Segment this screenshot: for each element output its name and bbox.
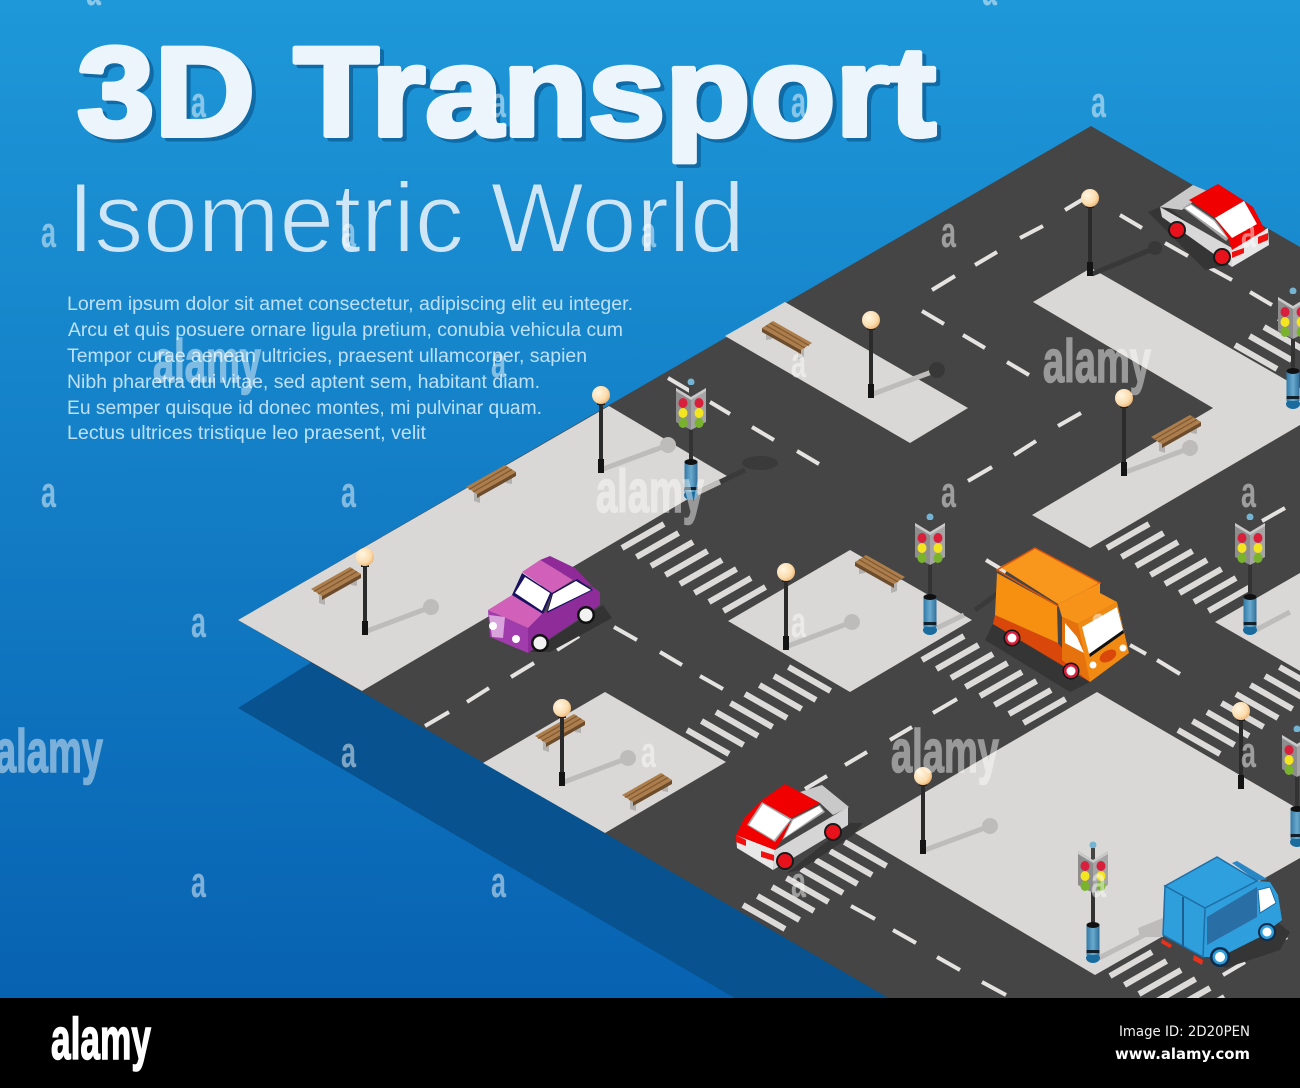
watermark letters: a <box>941 208 956 257</box>
body text block: Lorem ipsum dolor sit amet consectetur, adipiscing elit eu integer. <box>67 294 633 315</box>
watermark letters: a <box>1091 858 1106 907</box>
watermark letters: a <box>341 208 356 257</box>
body text block: Eu semper quisque id donec montes, mi pulvinar quam. <box>67 398 542 419</box>
watermark letters: a <box>1241 468 1256 517</box>
road surface <box>238 126 1300 1000</box>
watermark letters: a <box>791 858 806 907</box>
watermark letters: a <box>41 468 56 517</box>
car: red and white top right <box>1148 184 1269 270</box>
bottom black band <box>0 998 1300 1088</box>
body text block: Tempor curae aenean ultricies, praesent ullamcorper, sapien <box>67 346 587 367</box>
truck: orange <box>985 548 1129 692</box>
watermark letters: a <box>791 338 806 387</box>
body text block: Lectus ultrices tristique leo praesent, velit <box>67 423 427 444</box>
crosswalks <box>622 282 1300 1039</box>
watermark words: alamy <box>596 458 704 525</box>
traffic light shadows <box>695 456 1290 958</box>
watermark words: alamy <box>0 718 103 785</box>
watermark letters: a <box>641 728 656 777</box>
title: 3D Transport: 3D Transport <box>77 20 936 162</box>
watermark letters: a <box>341 468 356 517</box>
car: purple <box>488 556 612 653</box>
website: www.alamy.com <box>1115 1045 1250 1063</box>
watermark words: alamy <box>1043 328 1151 395</box>
watermark letters: a <box>491 78 506 127</box>
watermark letters: a <box>191 858 206 907</box>
watermark letters: a <box>491 858 506 907</box>
watermark letters: a <box>1091 598 1106 647</box>
car: red and white bottom <box>736 784 863 873</box>
watermark letters: a <box>491 338 506 387</box>
ground drop shadow <box>238 660 892 1000</box>
van: blue <box>1161 857 1290 968</box>
benches <box>311 321 1201 811</box>
body text block: Nibh pharetra dui vitae, sed aptent sem, habitant diam. <box>67 372 540 393</box>
watermark letters: a <box>41 208 56 257</box>
lamp shadows <box>367 241 1198 850</box>
street lamps <box>356 189 1250 854</box>
watermark letters: a <box>791 78 806 127</box>
image id: Image ID: 2D20PEN <box>1119 1024 1250 1040</box>
watermark letters: a <box>641 208 656 257</box>
watermark letters: a <box>1091 78 1106 127</box>
watermark letters: a <box>191 78 206 127</box>
watermark words: alamy <box>153 328 261 395</box>
sidewalk blocks <box>238 268 1300 975</box>
watermark letters: a <box>1241 728 1256 777</box>
subtitle: Isometric World: Isometric World <box>67 162 745 273</box>
watermark letters: a <box>191 598 206 647</box>
road lane dashes <box>425 198 1287 995</box>
traffic lights <box>676 288 1300 963</box>
watermark letters: a <box>341 728 356 777</box>
watermark words <box>0 328 1151 785</box>
title: 3D Transport: 3D Transport <box>81 24 940 166</box>
watermark letters: a <box>791 598 806 647</box>
watermark letters <box>41 0 1256 907</box>
body text block <box>67 294 633 444</box>
watermark letters: a <box>1241 208 1256 257</box>
watermark letters: a <box>941 468 956 517</box>
body text block: Arcu et quis posuere ornare ligula pretium, conubia vehicula cum <box>68 320 623 341</box>
watermark words: alamy <box>891 718 999 785</box>
alamy logo: alamy <box>51 1007 151 1072</box>
